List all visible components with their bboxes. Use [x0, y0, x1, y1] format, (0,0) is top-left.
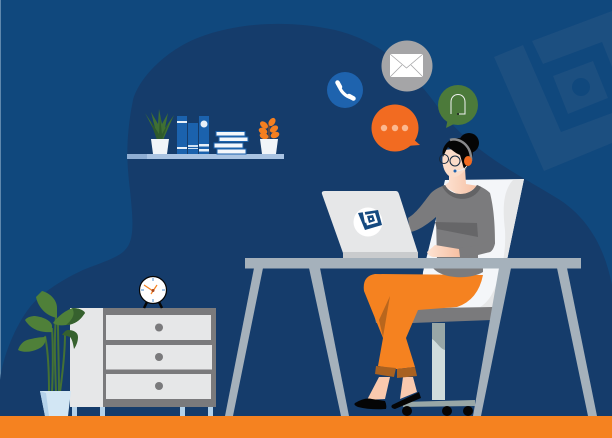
plant stems — [45, 316, 65, 392]
orange floor strip — [0, 416, 612, 438]
shelf board — [127, 154, 284, 159]
chair base and wheels — [402, 400, 475, 416]
icon: standing books — [177, 116, 209, 154]
office chair — [373, 179, 524, 416]
leaves — [36, 291, 57, 318]
shelf with plants and books — [127, 109, 284, 159]
chair seat — [373, 307, 493, 323]
torso and arm — [408, 185, 495, 277]
head — [440, 133, 479, 177]
drawer 3 — [106, 374, 211, 399]
laptop logo — [354, 208, 382, 236]
shoes — [354, 392, 421, 409]
icon: stacked books — [214, 132, 248, 154]
icon: phone bubble — [327, 72, 363, 108]
drawer cabinet — [70, 308, 216, 416]
glasses — [440, 154, 460, 166]
plant pot — [40, 391, 71, 416]
headset — [450, 139, 472, 172]
watermark logo — [494, 11, 612, 171]
desk top — [245, 258, 581, 268]
ankles — [367, 377, 417, 400]
chair back — [420, 179, 524, 308]
cabinet side — [70, 308, 103, 407]
person — [354, 133, 495, 409]
plant — [18, 291, 85, 416]
icon: mail bubble — [382, 40, 432, 92]
forearm and hand — [427, 240, 495, 257]
icon: headset bubble — [438, 85, 478, 128]
chair column — [432, 323, 445, 400]
desk legs — [225, 268, 597, 416]
icon: orange chat bubble — [372, 104, 420, 152]
icon: clock — [140, 276, 166, 308]
pant cuffs — [375, 366, 417, 378]
drawer 2 — [106, 345, 212, 370]
cabinet feet — [72, 407, 213, 416]
neck and chest — [444, 168, 478, 197]
drawer 1 — [106, 315, 211, 340]
pants crease — [379, 296, 390, 337]
cabinet body — [103, 308, 216, 407]
laptop — [322, 191, 418, 258]
pants — [364, 274, 483, 369]
icon: orange plant — [258, 117, 280, 154]
icon: spiky plant — [145, 109, 174, 154]
